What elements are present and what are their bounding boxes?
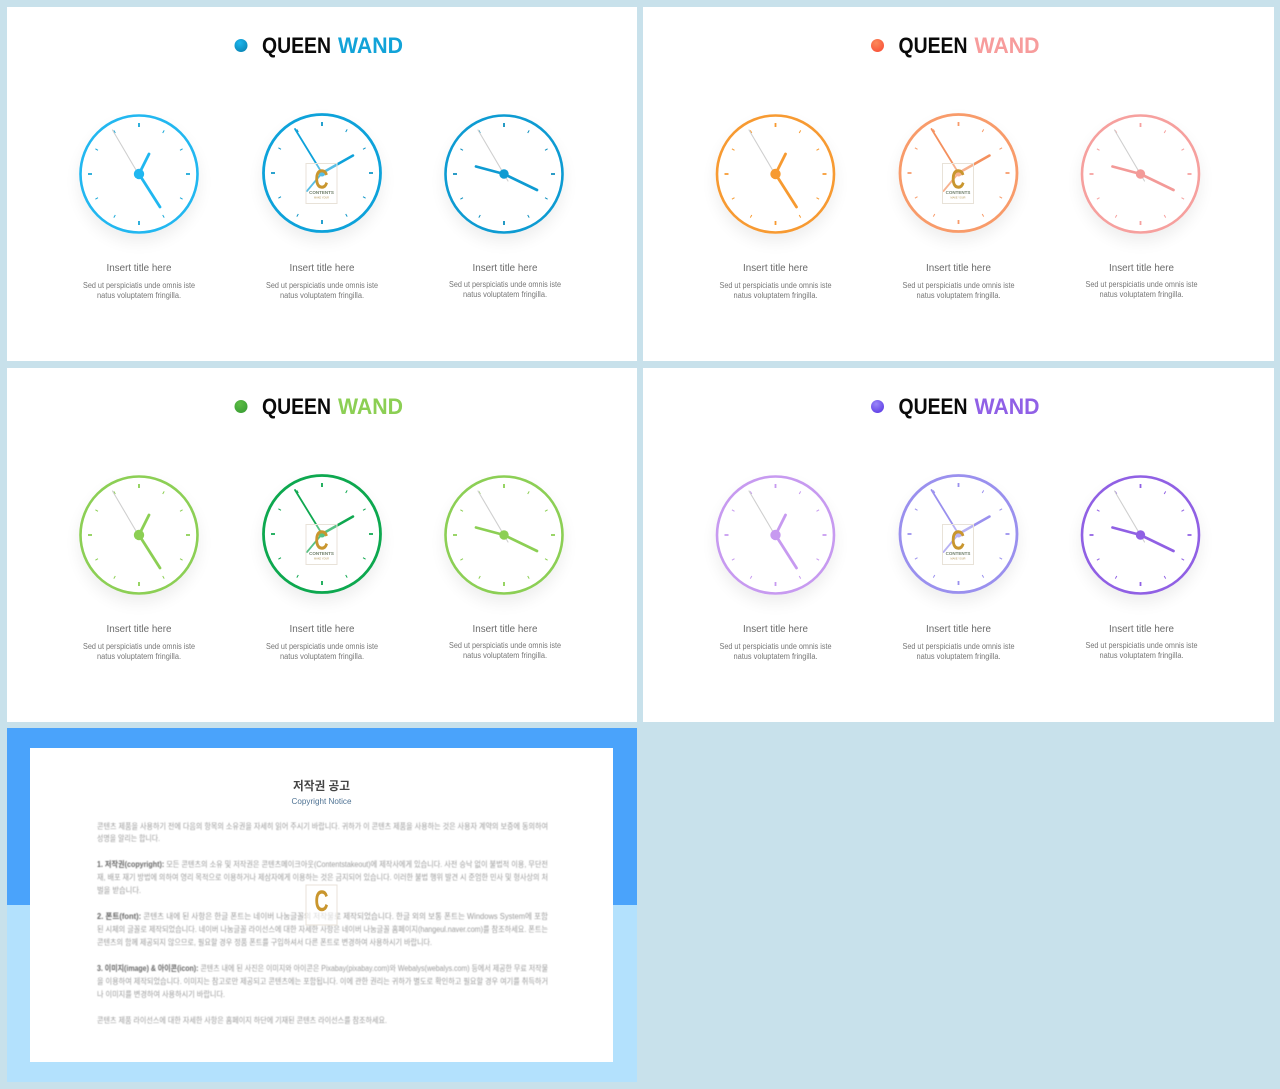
caption: green 1: natus voluptatem fringilla. (97, 652, 181, 661)
logo: contents badge (306, 164, 337, 204)
caption: orange 2: Insert title here (926, 263, 991, 274)
caption: green 3: natus voluptatem fringilla. (463, 651, 547, 660)
caption: green 3: Sed ut perspiciatis unde omnis iste (449, 641, 561, 650)
title: QUEEN WAND orange (898, 33, 1040, 58)
caption: purple 3: natus voluptatem fringilla. (1100, 651, 1184, 660)
title: QUEEN WAND purple: QUEEN (898, 394, 968, 419)
caption: blue 2 (266, 263, 378, 300)
caption: blue 3: Sed ut perspiciatis unde omnis iste (449, 280, 561, 289)
caption: blue 2: Insert title here (290, 263, 355, 274)
logo: contents badge: MAKE YOUR (314, 558, 329, 560)
text block: section 3 image and icon (97, 963, 548, 999)
logo: contents badge: MAKE YOUR (314, 196, 329, 200)
logo: contents badge (942, 164, 974, 204)
title dot: purple (871, 400, 884, 413)
panel: blue clocks (7, 7, 637, 361)
clock: orange 3 (1082, 116, 1199, 232)
title: QUEEN WAND orange: QUEEN (898, 33, 968, 58)
clock: orange 1 (717, 116, 834, 232)
caption: orange 1 (720, 263, 832, 300)
logo: contents badge: CONTENTS (309, 190, 334, 195)
clock: green 1 (80, 476, 198, 594)
panel: green clocks (7, 368, 637, 722)
logo: contents badge: CONTENTS (946, 190, 970, 195)
caption: purple 2 (902, 624, 1015, 661)
clock: orange 2 (900, 114, 1017, 232)
title: QUEEN WAND blue (262, 33, 403, 58)
caption: orange 2: Sed ut perspiciatis unde omnis iste (902, 281, 1015, 290)
caption: purple 3: Sed ut perspiciatis unde omnis iste (1086, 641, 1198, 650)
text block: section 1 copyright: 재, 배포 재기 방법에 의하여 영리 목적으로 이용하거나 제삼자에게 이용하는 것은 금지되어 있습니다. 이러한 불법 행위 발견 시 준엄한 민사 및 형사상의 처 (97, 872, 548, 882)
heading: copyright notice (292, 778, 352, 806)
title dot: green (234, 400, 248, 413)
caption: orange 3: Insert title here (1109, 263, 1174, 274)
text block: intro: 성명을 알리는 합니다. (97, 833, 160, 843)
text block: intro: 콘텐츠 제품을 사용하기 전에 다음의 항목의 소유권을 자세히 읽어 주시기 바랍니다. 귀하가 이 콘텐츠 제품을 사용하는 것은 사용자 계약의 보증에 동의하여 (97, 821, 548, 831)
clock: purple 3 (1082, 476, 1199, 594)
caption: blue 3: natus voluptatem fringilla. (463, 290, 547, 299)
logo: contents badge: C (951, 164, 965, 194)
caption: purple 2: Sed ut perspiciatis unde omnis iste (902, 642, 1015, 651)
logo: contents badge: MAKE YOUR (951, 196, 966, 200)
caption: purple 1 (720, 624, 832, 661)
caption: blue 3 (449, 263, 561, 299)
logo: contents badge: C (951, 524, 965, 556)
caption: purple 3: Insert title here (1109, 624, 1174, 635)
caption: orange 3: natus voluptatem fringilla. (1100, 290, 1184, 299)
caption: green 1 (83, 624, 195, 661)
caption: purple 1: Sed ut perspiciatis unde omnis iste (720, 642, 832, 651)
clock: green 3 (446, 476, 562, 594)
caption: blue 2: natus voluptatem fringilla. (280, 291, 364, 300)
clock: blue 3 (446, 116, 562, 232)
clock: blue 1 (80, 116, 198, 232)
text block: section 3 image and icon: 나 이미지를 변경하여 사용하시기 바랍니다. (97, 989, 225, 999)
caption: orange 1: natus voluptatem fringilla. (734, 291, 818, 300)
caption: orange 3 (1086, 263, 1198, 299)
text block: section 1 copyright: 벌을 받습니다. (97, 885, 141, 895)
title dot: blue (234, 39, 248, 52)
logo: contents badge: CONTENTS (309, 551, 334, 556)
text block: section 1 copyright (97, 859, 548, 895)
title: QUEEN WAND blue: WAND (338, 33, 403, 58)
caption: blue 1 (83, 263, 195, 300)
caption: green 2: Insert title here (290, 624, 355, 635)
caption: purple 2: Insert title here (926, 624, 991, 635)
logo: contents badge: CONTENTS (946, 551, 970, 556)
panel: orange clocks (643, 7, 1274, 361)
caption: purple 2: natus voluptatem fringilla. (916, 652, 1000, 661)
text block: section 2 font: 2. 폰트(font): 콘텐츠 내에 된 사항은 한글 폰트는 네이버 나눔글꼴의 저작물로 제작되었습니다. 한글 외의 보통 폰트는 Windows System에 포함 (97, 911, 549, 921)
caption: green 2: natus voluptatem fringilla. (280, 652, 364, 661)
logo: contents badge: C (314, 524, 328, 556)
text block: section 3 image and icon: 을 이용하여 제작되었습니다. 이미지는 참고로만 제공되고 콘텐츠에는 포함됩니다. 이에 관한 권리는 귀하가 별도로 확인하고 필요할 경우 여기를 취득하거 (97, 976, 548, 986)
clock: green 2 (264, 476, 380, 592)
text block: section 2 font: 콘텐츠의 함께 제공되지 않으므로, 필요할 경우 정품 폰트를 구입하셔서 다른 폰트로 변경하여 사용하시기 바랍니다. (97, 937, 432, 947)
title: QUEEN WAND purple (898, 394, 1040, 419)
panel: copyright notice (7, 728, 637, 1082)
title dot: orange (871, 39, 884, 52)
caption: orange 3: Sed ut perspiciatis unde omnis iste (1086, 280, 1198, 289)
text block: closing line: 콘텐츠 제품 라이선스에 대한 자세한 사항은 홈페이지 하단에 기재된 콘텐츠 라이선스를 참조하세요. (97, 1015, 387, 1025)
caption: orange 1: Insert title here (743, 263, 808, 274)
title: QUEEN WAND green (262, 394, 403, 419)
text block: section 1 copyright: 1. 저작권(copyright): 모든 콘텐츠의 소유 및 저작권은 콘텐츠메이크아웃(Contentstakeout)에 제작사에게 있습니다. 사전 승낙 없이 불법적 이용, 무단전 (97, 859, 548, 869)
caption: purple 1: natus voluptatem fringilla. (734, 652, 818, 661)
logo: contents badge (942, 524, 974, 564)
heading: copyright notice: 저작권 공고 (293, 778, 350, 793)
caption: orange 2: natus voluptatem fringilla. (916, 291, 1000, 300)
clock: purple 2 (900, 476, 1017, 592)
caption: orange 2 (902, 263, 1015, 300)
clock: blue 2 (264, 114, 380, 232)
caption: blue 1: Insert title here (106, 263, 172, 274)
caption: green 1: Sed ut perspiciatis unde omnis iste (83, 642, 195, 651)
title: QUEEN WAND purple: WAND (974, 394, 1040, 419)
caption: blue 1: natus voluptatem fringilla. (97, 291, 181, 300)
text block: section 2 font: 된 시체의 글꼴로 제작되었습니다. 네이버 나눔글꼴 라이선스에 대한 자세한 사항은 네이버 나눔글꼴 홈페이지(hangeul.naver.com)를 참조하세요. 폰트는 (97, 924, 548, 934)
clock: purple 1 (717, 476, 834, 594)
logo: contents badge: MAKE YOUR (951, 558, 966, 560)
panel: purple clocks (643, 368, 1274, 722)
title: QUEEN WAND green: QUEEN (262, 394, 331, 419)
text block: section 3 image and icon: 3. 이미지(image) & 아이콘(icon): 콘텐츠 내에 된 사진은 이미지와 아이콘은 Pixabay(pixabay.com)와 Webalys(webalys.com) 등에서 제공한 무료 저작물 (97, 963, 548, 973)
text block: section 2 font (97, 911, 549, 947)
logo: contents badge (306, 885, 337, 925)
caption: green 1: Insert title here (106, 624, 172, 635)
logo: contents badge: C (314, 164, 328, 194)
caption: blue 3: Insert title here (472, 263, 538, 274)
caption: orange 1: Sed ut perspiciatis unde omnis iste (720, 281, 832, 290)
caption: green 3: Insert title here (472, 624, 538, 635)
title: QUEEN WAND blue: QUEEN (262, 33, 331, 58)
heading: copyright notice: Copyright Notice (292, 796, 352, 806)
caption: green 3 (449, 624, 561, 660)
title: QUEEN WAND orange: WAND (974, 33, 1040, 58)
caption: purple 1: Insert title here (743, 624, 808, 635)
caption: green 2: Sed ut perspiciatis unde omnis iste (266, 642, 378, 651)
caption: purple 3 (1086, 624, 1198, 660)
caption: green 2 (266, 624, 378, 661)
logo: contents badge: C (314, 885, 328, 918)
caption: blue 1: Sed ut perspiciatis unde omnis iste (83, 281, 195, 290)
title: QUEEN WAND green: WAND (338, 394, 403, 419)
caption: blue 2: Sed ut perspiciatis unde omnis iste (266, 281, 378, 290)
text block: intro (97, 821, 548, 843)
logo: contents badge (306, 524, 337, 564)
